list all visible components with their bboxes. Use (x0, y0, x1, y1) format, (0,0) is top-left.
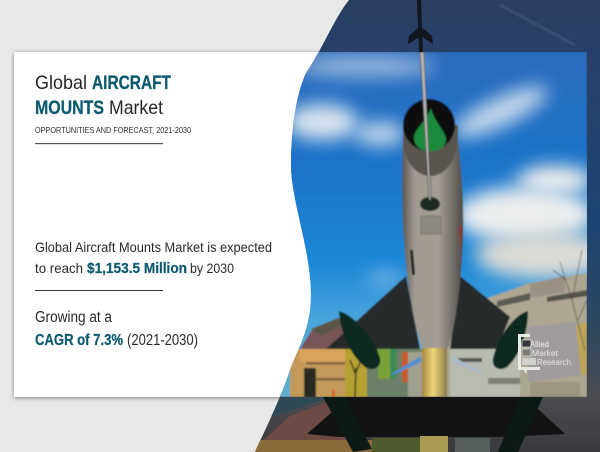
title rule (35, 143, 163, 144)
title: Global (35, 72, 87, 94)
CAGR statement: CAGR of 7.3% (35, 332, 123, 349)
title (35, 72, 171, 119)
CAGR statement (35, 309, 198, 349)
clouds (286, 55, 600, 284)
CAGR statement: Growing at a (35, 309, 112, 326)
blue tail struts (391, 356, 482, 375)
building left (290, 318, 422, 397)
jet fuselage (402, 99, 463, 348)
title: AIRCRAFT (92, 72, 171, 94)
right missile (493, 311, 528, 369)
subtitle: OPPORTUNITIES AND FORECAST, 2021-2030 (35, 125, 191, 135)
bare tree right (553, 250, 587, 350)
darkened backdrop photo (250, 0, 600, 452)
white text card (14, 52, 587, 397)
sky (280, 52, 587, 397)
logo: Allied Market Research: Allied (530, 339, 549, 349)
logo: Allied Market Research: Research (537, 357, 571, 367)
divider rule (35, 290, 163, 291)
photo panel (280, 52, 600, 397)
market value statement: to reach (35, 260, 83, 276)
left missile (339, 311, 380, 369)
market value statement: Global Aircraft Mounts Market is expected (35, 239, 272, 255)
title: Market (109, 97, 164, 119)
pitot probe (420, 52, 431, 200)
jet wings (326, 276, 510, 349)
logo: Allied Market Research (518, 334, 571, 374)
building right (440, 273, 587, 397)
market value statement: $1,153.5 Million (87, 260, 187, 277)
logo: Allied Market Research: Market (532, 348, 559, 358)
title: MOUNTS (35, 97, 104, 119)
market value statement (35, 239, 272, 277)
market value statement: by 2030 (190, 260, 234, 276)
glowing pylon (422, 347, 447, 397)
CAGR statement: (2021-2030) (127, 332, 198, 349)
dark tail fin reflection (408, 0, 433, 52)
